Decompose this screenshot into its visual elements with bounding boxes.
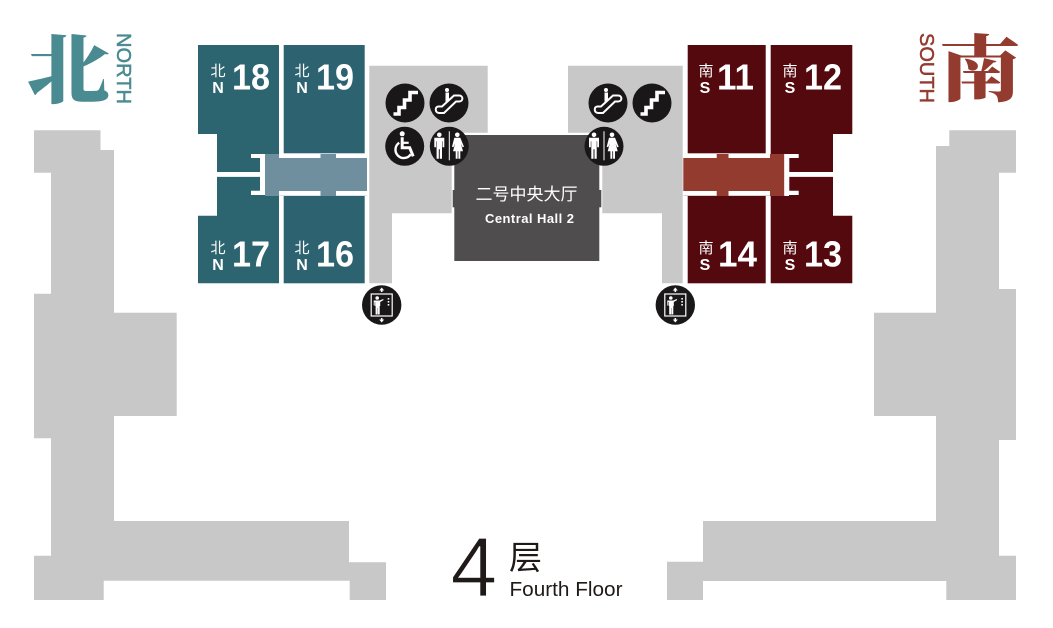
icon: elevator right [656, 285, 695, 325]
right wing building outline [667, 130, 1016, 600]
hall S12: S [785, 80, 796, 97]
panel: central hall 2 [452, 133, 602, 261]
icon: restrooms right [584, 127, 624, 166]
north label: NORTH [112, 33, 134, 104]
floor title: 4 [450, 520, 497, 614]
hall N18: N [212, 80, 224, 97]
hall S11: S [700, 80, 711, 97]
icon: escalator right [588, 84, 628, 122]
north heading: 北 [26, 30, 110, 114]
right core circulation area [568, 66, 683, 283]
south heading: 南 [939, 31, 1021, 111]
north corridor [265, 154, 367, 196]
hall N16 [284, 196, 365, 283]
left wing building outline [34, 130, 386, 600]
icon: escalator left [430, 84, 468, 122]
hall S12: 南 [782, 63, 798, 80]
hall N16: 16 [316, 234, 354, 274]
hall S14: 南 [698, 240, 714, 257]
hall name chinese: 二号中央大厅 [476, 185, 578, 204]
hall N16: N [296, 257, 308, 274]
south corridor [683, 154, 784, 196]
hall N17: 17 [232, 234, 270, 274]
hall S13: 13 [804, 234, 842, 274]
hall N17 [198, 177, 279, 283]
hall S13 [771, 177, 852, 283]
panel: north zone halls [198, 45, 369, 283]
hall S11: 南 [698, 63, 714, 80]
icon: restrooms left [430, 127, 469, 166]
hall N18 [198, 45, 279, 172]
hall S14 [688, 196, 766, 283]
floor title [450, 520, 623, 614]
hall N19: 19 [316, 56, 354, 98]
icon: stairs left [386, 84, 424, 122]
hall S11: 11 [717, 56, 754, 98]
hall N16: 北 [294, 240, 310, 257]
hall S14: S [700, 257, 711, 274]
hall N17: 北 [210, 240, 226, 257]
hall name english: Central Hall 2 [485, 211, 574, 226]
hall S11 [688, 45, 766, 153]
floor label chinese: 层 [509, 539, 542, 576]
south label: SOUTH [915, 33, 937, 103]
icon: elevator left [362, 285, 401, 325]
left core circulation area [369, 66, 488, 283]
icon: accessible toilet [385, 127, 424, 166]
hall N18: 北 [210, 63, 226, 80]
hall S12: 12 [804, 56, 842, 98]
icon: stairs right [632, 84, 672, 122]
hall S14: 14 [718, 234, 757, 274]
hall N18: 18 [232, 56, 270, 98]
hall S12 [771, 45, 852, 172]
panel: south zone halls [683, 45, 852, 283]
floor label english: Fourth Floor [510, 579, 623, 601]
hall N19: N [296, 80, 308, 97]
hall N17: N [212, 257, 224, 274]
hall N19: 北 [294, 63, 310, 80]
hall S13: 南 [782, 240, 798, 257]
hall S13: S [785, 257, 796, 274]
hall N19 [284, 45, 365, 153]
